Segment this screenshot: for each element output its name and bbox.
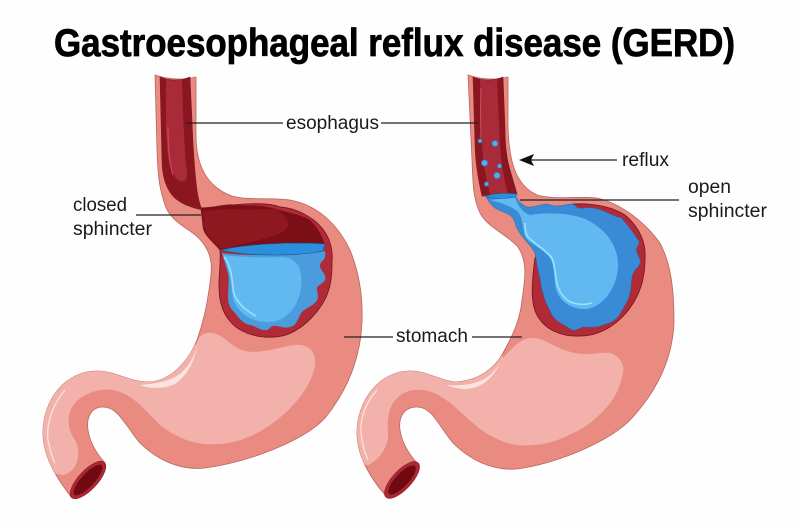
acid light area	[223, 255, 301, 322]
lighter lower stomach area	[30, 333, 315, 475]
acid body	[222, 251, 325, 330]
label: reflux with arrow: reflux	[622, 150, 669, 171]
acid light area	[490, 197, 618, 309]
label: closed sphincter: sphincter	[73, 219, 153, 240]
closed upper lumen	[201, 205, 325, 250]
pyloric opening	[65, 456, 111, 504]
esophagus highlight	[168, 127, 173, 175]
acid bubbles	[478, 139, 502, 186]
left stomach: closed sphincter	[30, 75, 362, 504]
esophagus highlight	[480, 88, 482, 142]
label: closed sphincter: closed	[73, 195, 127, 216]
label: esophagus: esophagus	[286, 113, 379, 134]
lighter lower stomach area	[345, 338, 623, 465]
stomach lumen wall	[532, 204, 645, 336]
acid highlight	[525, 223, 592, 304]
label: reflux with arrow	[519, 150, 669, 171]
stomach wall outline	[357, 75, 674, 497]
stomach lumen wall	[201, 204, 332, 337]
title: Gastroesophageal reflux disease (GERD)	[54, 22, 735, 65]
esophagus inner fold	[480, 79, 508, 196]
label: closed sphincter	[73, 195, 201, 240]
highlights	[447, 363, 500, 389]
acid surface	[221, 243, 325, 255]
label: open sphincter	[520, 177, 768, 222]
label: stomach: stomach	[396, 326, 468, 347]
acid surface	[485, 193, 517, 198]
esophagus lumen	[473, 77, 517, 196]
esophagus inner fold	[166, 79, 187, 182]
stomach wall outline	[43, 75, 362, 498]
label: open sphincter: sphincter	[688, 201, 768, 222]
right stomach: open sphincter	[345, 75, 674, 504]
acid body	[486, 195, 640, 330]
pyloric opening	[379, 456, 425, 504]
label: open sphincter: open	[688, 177, 731, 198]
esophagus lumen	[160, 77, 202, 210]
acid highlight	[224, 257, 256, 316]
highlights	[140, 347, 197, 388]
